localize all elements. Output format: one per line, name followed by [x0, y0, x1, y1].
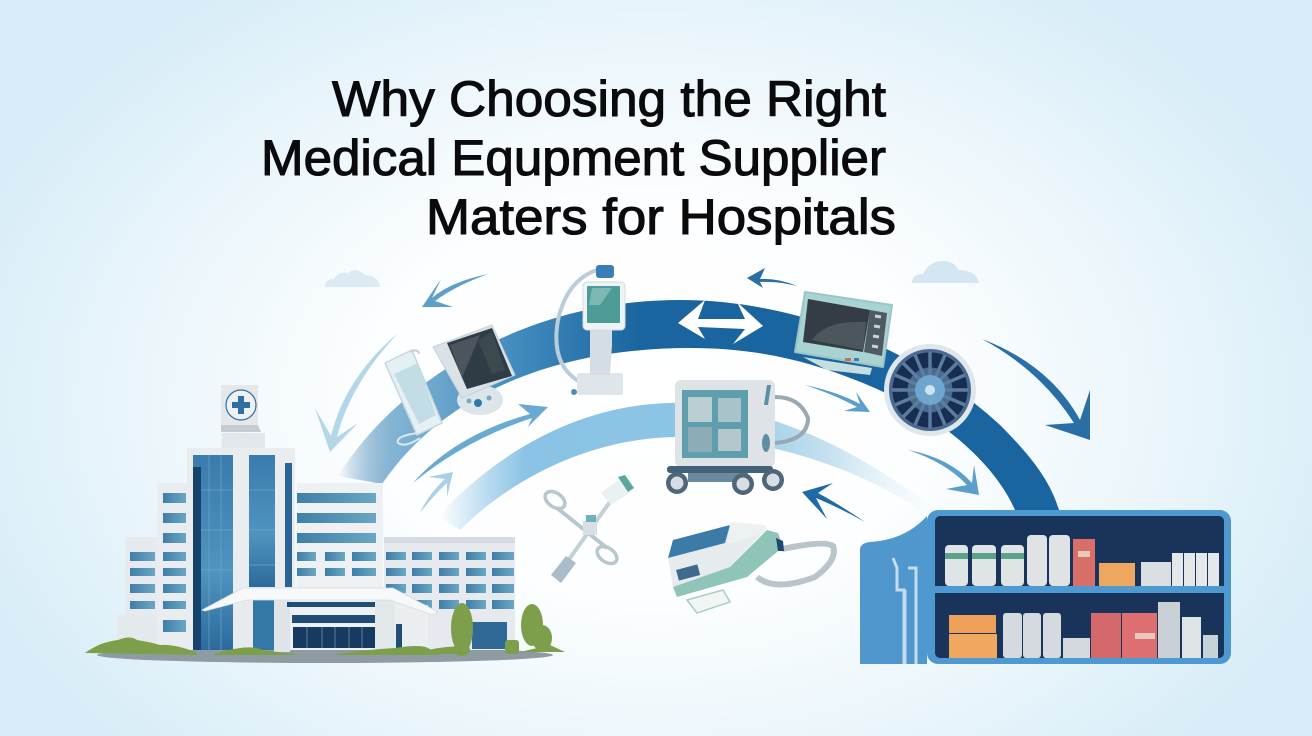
- title: Maters for Hospitals: [426, 189, 896, 245]
- cabinet interior: [935, 516, 1224, 658]
- central tower: [222, 433, 265, 458]
- device: imaging cart: [666, 380, 808, 495]
- left tower wing: [157, 483, 189, 650]
- ground: [97, 647, 553, 663]
- device: specimen cylinder: [385, 350, 442, 445]
- top shelf items: [945, 535, 1219, 586]
- arrow: lower right: [908, 450, 979, 495]
- arrow: centre right: [805, 385, 870, 412]
- arrow: left lower: [420, 472, 453, 513]
- title: Why Choosing the Right: [332, 71, 886, 127]
- arrow: top left: [422, 274, 488, 307]
- right wing: [297, 483, 383, 593]
- device: surgical clamp: [542, 475, 634, 583]
- cloud: right: [912, 261, 979, 283]
- arrow: top right: [747, 268, 797, 288]
- supply shelf unit: [860, 510, 1231, 664]
- rooftop sign: [221, 385, 261, 432]
- side panel with pipes: [860, 516, 927, 664]
- left low wing: [117, 615, 157, 650]
- band: dark blue supply arc: [338, 300, 1059, 510]
- arrow: left light: [315, 333, 398, 452]
- device: patient monitor: [433, 325, 515, 415]
- device: wall monitor: [795, 292, 892, 375]
- cabinet frame: [927, 510, 1231, 664]
- band: light blue return arc: [438, 403, 943, 530]
- title: Medical Equpment Supplier: [261, 130, 886, 186]
- arrow: large far right: [982, 339, 1090, 440]
- hospital building: [85, 385, 565, 663]
- canopy: [202, 588, 438, 615]
- cloud: left: [325, 270, 380, 287]
- entrance: [233, 600, 253, 650]
- far right wing: [384, 537, 515, 650]
- bottom shelf items: [949, 602, 1218, 658]
- arrow: lower centre: [802, 483, 865, 522]
- shrubs and trees: [85, 603, 565, 656]
- device: ventilator: [556, 265, 625, 395]
- title: [261, 71, 896, 245]
- arrow: white double-headed: [678, 300, 763, 344]
- device: turbine: [884, 344, 976, 436]
- middle shelf: [932, 586, 1226, 593]
- arrow: left middle: [413, 404, 548, 483]
- device: portable pump: [668, 522, 834, 613]
